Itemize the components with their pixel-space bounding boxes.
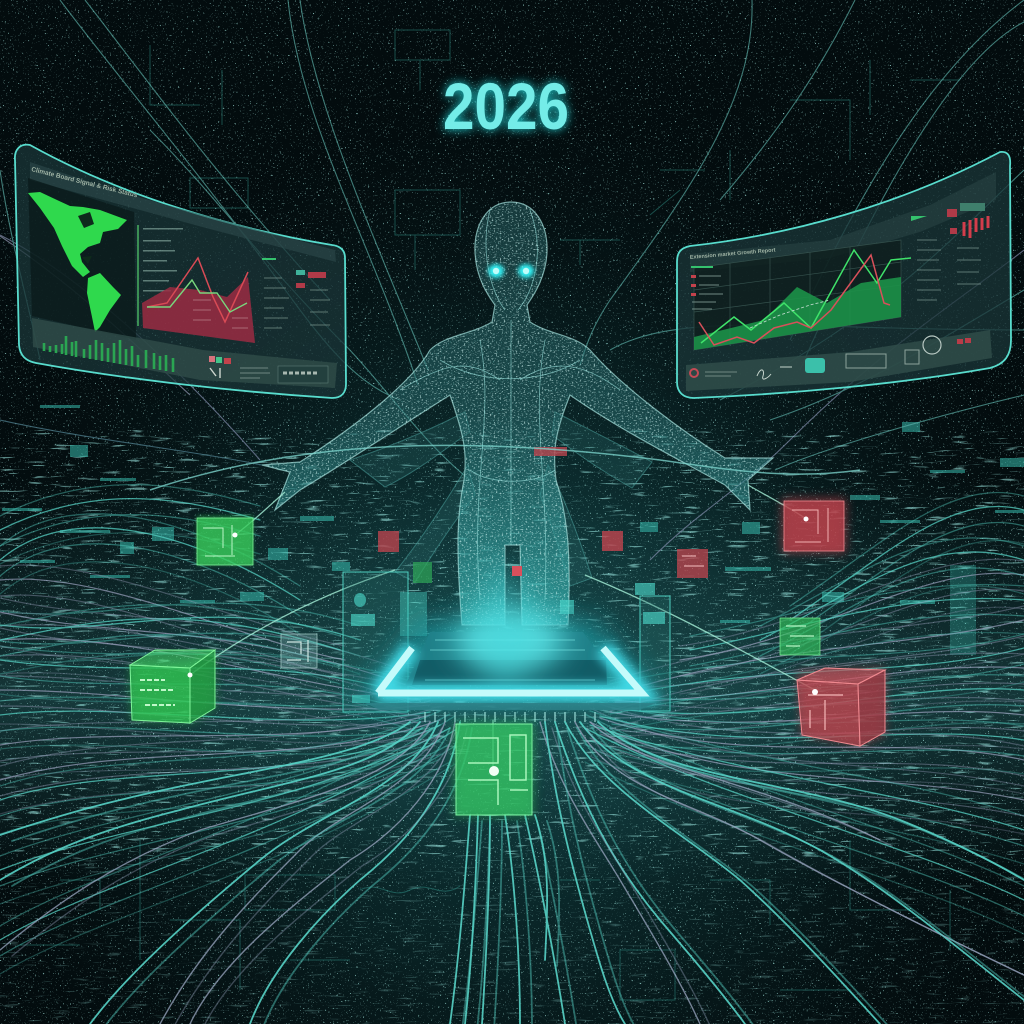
wire fan below platform [0,722,1024,1024]
bar chart [32,318,337,388]
data cube: left large green [130,650,215,723]
panel header [690,172,996,272]
figure: secondary arms [350,412,652,586]
map dark area [28,178,136,340]
horizontal band wires [0,499,1024,940]
panel: right dashboard [677,152,1011,398]
torso wiring [400,210,620,620]
circuit blocks right [640,422,1024,655]
eyes [488,264,534,278]
panel frame [15,145,346,398]
data cube: right upper red [782,498,846,553]
data cube: small red right [677,549,708,578]
panel: left dashboard [15,145,346,398]
band wires: extra strands below [0,515,1024,956]
data cube: left upper green [197,516,253,565]
data cube: small red center right [602,531,623,551]
fan wires: extra strands [12,728,1024,1024]
data cube: right lower red [797,668,885,746]
legend [691,266,723,309]
red marker near thigh [512,566,522,576]
title: 2026: 2026 [443,69,569,143]
line chart: green area [694,250,911,350]
bottom controls [686,330,992,391]
data cube: small red center left [378,531,399,552]
connector lines to cubes [190,485,815,770]
panel header: Climate Board Signal & Risk Status [31,166,138,199]
data cube: small gray left [281,634,317,668]
panel header [30,162,336,262]
side list [911,203,988,300]
chart grid [694,240,901,350]
platform: glowing frame [350,565,670,722]
map: Americas [28,192,127,332]
circuit blocks left [2,405,350,603]
line chart: red area [142,258,255,343]
upper long wires [0,0,1024,560]
data cube: bottom center green [454,722,534,816]
divider [137,225,139,326]
data cube: small green center [413,562,432,583]
figure: translucent humanoid [260,200,780,630]
band wires: extra strands above [0,485,1024,926]
chart list [143,228,183,292]
panel header: Extension market Growth Report [690,248,776,261]
panel frame [677,152,1011,398]
band wires: extra strands lower [0,533,1024,974]
red marker on torso [534,447,567,456]
side list [262,258,330,328]
ghost panels beside platform [343,572,670,712]
arm crossing wire [150,445,860,490]
title: 2026: 2026 [443,69,569,143]
data cube: small green right [780,618,820,655]
status chips [209,356,328,383]
